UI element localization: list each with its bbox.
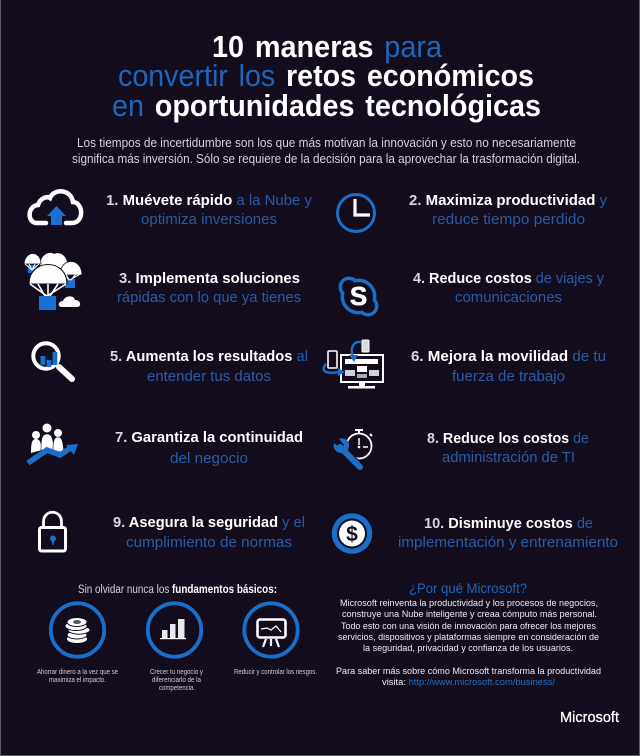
item 4: 4. Reduce costos de viajes y — [413, 270, 604, 287]
icon: clock — [338, 194, 374, 232]
why microsoft body: visita: http://www.microsoft.com/business/ — [382, 677, 555, 688]
icon: wrench and stopwatch — [334, 430, 372, 467]
why microsoft body: la seguridad, privacidad y confianza de los usuarios. — [363, 643, 573, 654]
item 7 — [115, 429, 303, 467]
icon: parachutes — [24, 253, 82, 310]
item 9: 9. Asegura la seguridad y el — [113, 514, 305, 531]
item 7: del negocio — [170, 450, 248, 467]
why microsoft body: construye una Nube inteligente y creaa cómputo más personal. — [342, 609, 597, 620]
icon: cloud upload — [30, 191, 81, 225]
why microsoft body: servicios, dispositivos y plataformas siempre en consideración de — [338, 632, 599, 643]
caption: save money: maximiza el impacto. — [49, 675, 106, 684]
item 5: 5. Aumenta los resultados al — [110, 348, 308, 365]
icon: devices and monitor — [324, 340, 383, 388]
caption: grow business: Crecer tu negocio y — [150, 667, 203, 676]
caption: save money — [37, 667, 118, 684]
item 6 — [411, 348, 606, 385]
icon: dollar coin: $ — [346, 523, 358, 546]
microsoft wordmark: Microsoft — [560, 709, 620, 726]
item 7: 7. Garantiza la continuidad — [115, 429, 303, 446]
item 9 — [113, 514, 305, 551]
why microsoft body: Para saber más sobre cómo Microsoft transforma la productividad — [336, 666, 601, 677]
item 10: 10. Disminuye costos de — [424, 515, 593, 532]
why microsoft heading: ¿Por qué Microsoft? — [409, 581, 527, 596]
icon: skype: S — [350, 281, 367, 311]
item 3: rápidas con lo que ya tienes — [117, 289, 301, 306]
icon: team with arrow — [28, 424, 78, 463]
item 4: comunicaciones — [455, 289, 562, 306]
item 1 — [106, 192, 312, 228]
icon: skype — [338, 276, 378, 316]
why microsoft body — [336, 598, 601, 688]
icon: dollar coin — [332, 513, 372, 554]
item 6: 6. Mejora la movilidad de tu — [411, 348, 606, 365]
item 1: 1. Muévete rápido a la Nube y — [106, 192, 312, 209]
item 2: reduce tiempo perdido — [432, 211, 585, 228]
item 10 — [398, 515, 618, 551]
item 5: entender tus datos — [147, 368, 271, 385]
icon: bar chart in circle — [148, 603, 201, 657]
title: 10 maneras para — [212, 30, 442, 64]
item 3 — [117, 270, 301, 306]
caption: grow business: diferenciarlo de la — [152, 675, 202, 684]
item 10: implementación y entrenamiento — [398, 534, 618, 551]
title: convertir los retos económicos — [118, 59, 534, 93]
item 4 — [413, 270, 604, 306]
intro text: Los tiempos de incertidumbre son los que más motivan la innovación y esto no necesariamente — [77, 136, 576, 150]
title — [112, 30, 541, 123]
fundamentals heading: Sin olvidar nunca los fundamentos básicos: — [78, 584, 277, 596]
caption: grow business — [150, 667, 203, 692]
intro text — [72, 136, 580, 166]
intro text: significa más inversión. Sólo se requiere de la decisión para la aprovechar la trasformación digital. — [72, 152, 580, 166]
item 3: 3. Implementa soluciones — [119, 270, 300, 287]
item 5 — [110, 348, 308, 385]
item 8: 8. Reduce los costos de — [427, 430, 589, 447]
caption: save money: Ahorrar dinero a la vez que se — [37, 667, 118, 676]
item 2: 2. Maximiza productividad y — [409, 192, 607, 209]
icon: magnifier with chart — [33, 343, 72, 379]
item 2 — [409, 192, 607, 228]
item 8 — [427, 430, 589, 466]
why microsoft body: Microsoft reinventa la productividad y los procesos de negocios, — [340, 598, 598, 609]
icon: coins in circle — [51, 603, 104, 657]
item 6: fuerza de trabajo — [452, 368, 565, 385]
icon: padlock — [40, 512, 66, 551]
item 1: optimiza inversiones — [141, 211, 277, 228]
title: en oportunidades tecnológicas — [112, 89, 541, 123]
icon: presentation board in circle — [244, 603, 298, 657]
caption: grow business: competencia. — [159, 683, 195, 692]
caption: reduce risks: Reducir y controlar los riesgos. — [234, 667, 317, 676]
why microsoft body: Todo esto con una visión de innovación para ofrecer los mejores — [341, 621, 596, 632]
item 9: cumplimiento de normas — [126, 534, 292, 551]
item 8: administración de TI — [442, 449, 575, 466]
